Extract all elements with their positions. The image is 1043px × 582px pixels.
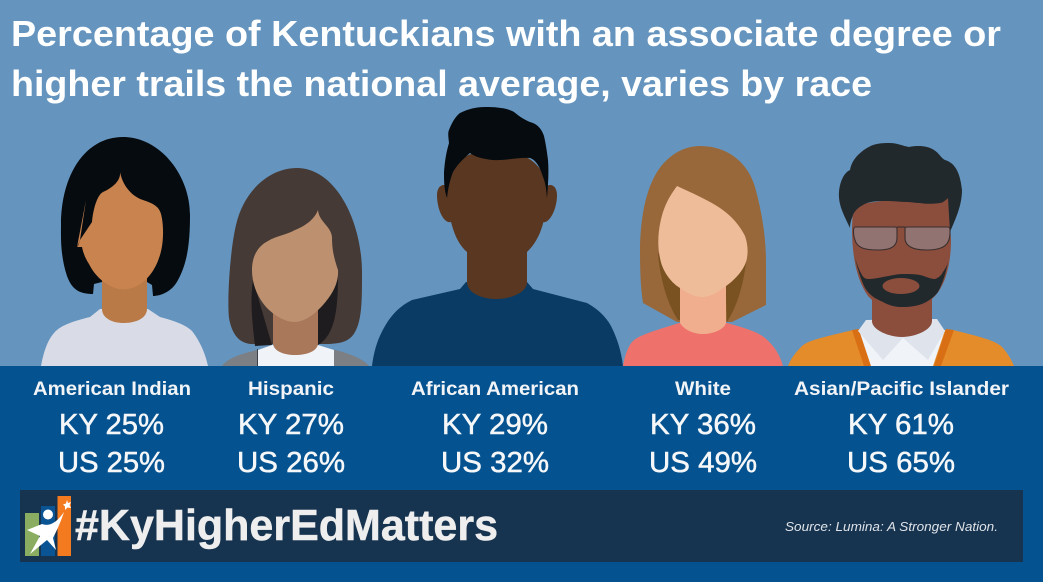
mouth [882, 278, 920, 294]
panel: statistics band [0, 366, 1043, 582]
stat: American Indian: US 25% [58, 447, 165, 479]
stat: White: US 49% [649, 447, 757, 479]
stat: African American [411, 379, 579, 479]
figure: African American man [372, 107, 623, 366]
stat: African American: KY 29% [442, 409, 548, 441]
stat: White [649, 379, 757, 479]
figure: Asian/Pacific Islander man [788, 143, 1014, 366]
stat: Asian/Pacific Islander: Asian/Pacific Islander [794, 379, 1010, 400]
hashtag: #KyHigherEdMatters [75, 501, 498, 550]
glasses [854, 227, 950, 250]
icon: Kentucky higher education logo [25, 496, 71, 556]
source note: Source: Lumina: A Stronger Nation. [785, 520, 998, 534]
stat: Hispanic [237, 379, 345, 479]
stat: Asian/Pacific Islander: KY 61% [848, 409, 954, 441]
stat: American Indian: American Indian [33, 379, 191, 400]
stat: Asian/Pacific Islander: US 65% [847, 447, 955, 479]
stat: African American: US 32% [441, 447, 549, 479]
stat: Asian/Pacific Islander [794, 379, 1010, 479]
figure: American Indian woman [41, 137, 208, 366]
stat: Hispanic: Hispanic [248, 379, 334, 400]
hair strand sliver [77, 200, 86, 247]
stat: Hispanic: US 26% [237, 447, 345, 479]
stat: Hispanic: KY 27% [238, 409, 344, 441]
stat: White: White [675, 379, 731, 400]
stat: American Indian [33, 379, 191, 479]
figure: White woman [623, 146, 783, 366]
title: higher trails the national average, varies by race [11, 63, 872, 104]
stat: American Indian: KY 25% [59, 409, 164, 441]
title: Percentage of Kentuckians with an associate degree or [11, 13, 1001, 54]
beard [855, 258, 948, 307]
stat: White: KY 36% [650, 409, 756, 441]
footer bar [20, 490, 1023, 562]
title [11, 13, 1001, 104]
figure: Hispanic woman [222, 168, 369, 366]
stat: African American: African American [411, 379, 579, 400]
